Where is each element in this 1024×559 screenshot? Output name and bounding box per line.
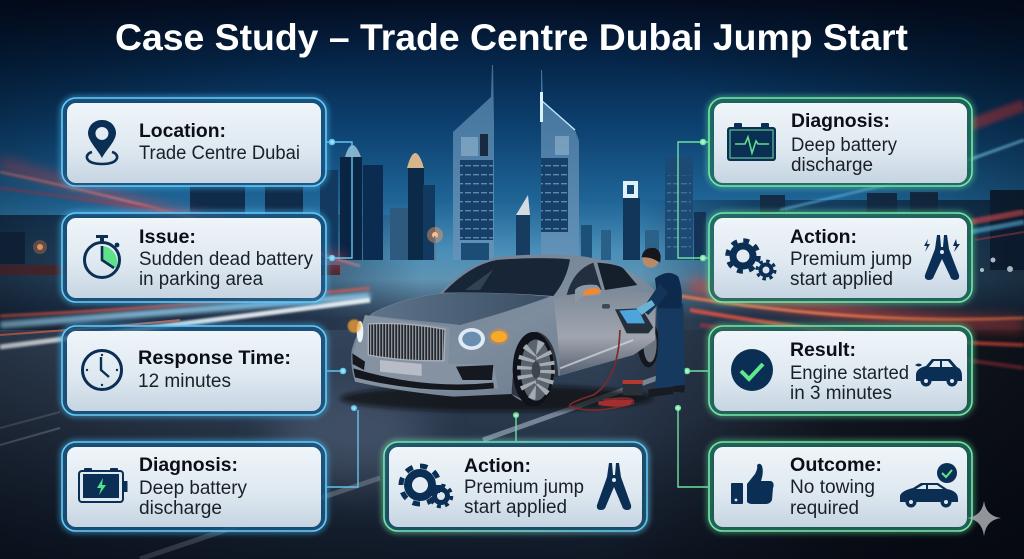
label: location: Location: bbox=[139, 120, 226, 142]
connector lines: blue bbox=[327, 139, 358, 487]
label: action: Action: bbox=[464, 455, 531, 477]
label: diagnosis: Diagnosis: bbox=[791, 110, 890, 132]
value: issue line two: in parking area bbox=[139, 269, 263, 290]
value: diagnosis line two: discharge bbox=[139, 498, 222, 519]
value: response time: 12 minutes bbox=[138, 371, 231, 392]
value: diagnosis: Deep battery bbox=[139, 478, 247, 499]
icon: thumbs up bbox=[731, 464, 774, 504]
icon: battery with bolt bbox=[79, 468, 128, 502]
icon: stopwatch bbox=[84, 235, 120, 278]
icon: jumper clamp bbox=[597, 463, 631, 510]
connector lines: green bbox=[514, 139, 708, 487]
value: location: Trade Centre Dubai bbox=[139, 143, 300, 164]
panel: diagnosis left bbox=[62, 442, 326, 531]
icon: gears bbox=[401, 466, 452, 506]
label: outcome: Outcome: bbox=[790, 454, 882, 476]
label: issue: Issue: bbox=[139, 226, 196, 248]
panel: diagnosis right bbox=[709, 98, 972, 186]
value: result line two: in 3 minutes bbox=[790, 383, 892, 404]
value: issue: Sudden dead battery bbox=[139, 249, 313, 270]
value: action: Premium jump bbox=[790, 249, 912, 270]
panel: response time bbox=[62, 326, 326, 415]
car: silver luxury sedan bbox=[340, 254, 659, 412]
icon: sparkle watermark bbox=[967, 501, 1001, 536]
icon: map pin bbox=[87, 120, 117, 164]
skyline with Emirates towers bbox=[320, 65, 706, 261]
value: action line two: start applied bbox=[790, 269, 893, 290]
label: response time: Response Time: bbox=[138, 347, 291, 369]
label: result: Result: bbox=[790, 339, 856, 361]
label: action: Action: bbox=[790, 226, 857, 248]
value: action: Premium jump bbox=[464, 477, 584, 498]
value: diagnosis: Deep battery bbox=[791, 135, 897, 156]
icon: car with check badge bbox=[900, 463, 958, 508]
panel: issue bbox=[62, 213, 326, 302]
icon: car bbox=[915, 359, 962, 386]
label: diagnosis: Diagnosis: bbox=[139, 454, 238, 476]
value: outcome line two: required bbox=[790, 498, 859, 519]
icon: jumper clamp with sparks bbox=[924, 235, 960, 280]
icon: battery with pulse bbox=[727, 123, 776, 161]
icon: check circle bbox=[731, 349, 773, 391]
panel: outcome bbox=[709, 442, 972, 531]
value: outcome: No towing bbox=[790, 477, 875, 498]
icon: gears bbox=[728, 240, 775, 279]
panel: action right bbox=[709, 213, 972, 302]
panel: action centre bbox=[384, 442, 647, 531]
value: action line two: start applied bbox=[464, 497, 567, 518]
icon: clock bbox=[82, 350, 122, 390]
value: result: Engine started bbox=[790, 363, 909, 384]
panel: result bbox=[709, 326, 972, 415]
title: Case Study – Trade Centre Dubai Jump Start bbox=[115, 17, 908, 58]
panel: location bbox=[62, 98, 326, 186]
value: diagnosis line two: discharge bbox=[791, 155, 873, 176]
technician with diagnostic tablet and jump leads bbox=[570, 248, 685, 410]
